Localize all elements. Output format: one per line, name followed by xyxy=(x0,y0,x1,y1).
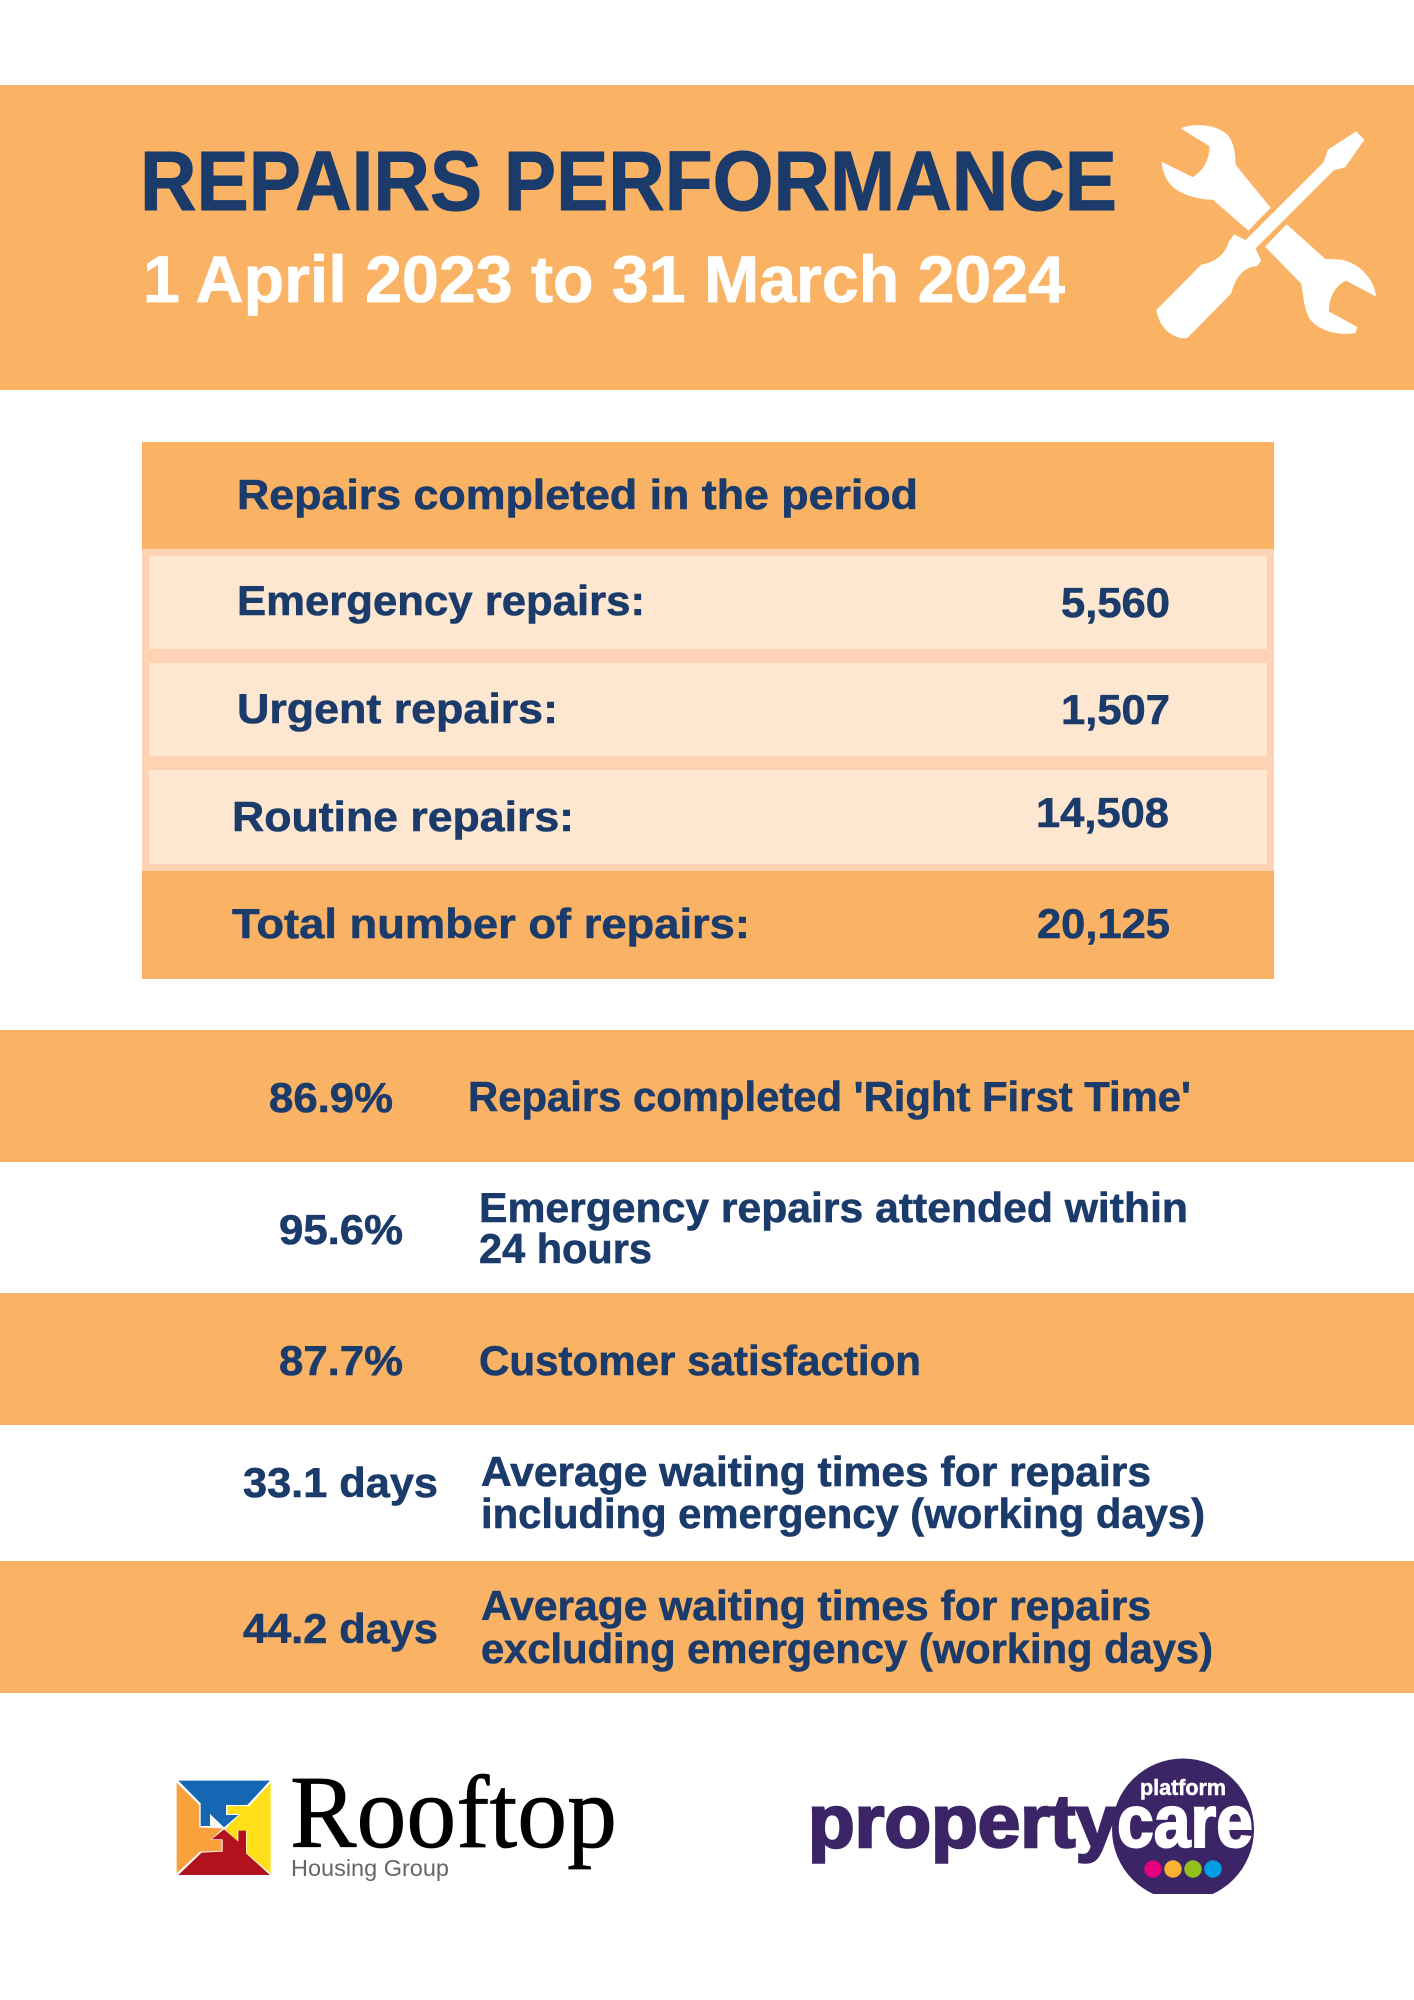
logo: Rooftop Housing Group: Rooftop xyxy=(290,1755,617,1870)
stat band: right first time: Repairs completed 'Right First Time' xyxy=(468,1073,1191,1120)
row: emergency repairs: Emergency repairs: xyxy=(237,577,645,624)
logo: Rooftop Housing Group: Housing Group xyxy=(291,1855,449,1881)
stat band: emergency attendance: 95.6% xyxy=(279,1206,403,1253)
stat band: waiting time including emergency xyxy=(243,1448,1205,1537)
header banner xyxy=(0,85,1414,390)
stat band: customer satisfaction: 87.7% xyxy=(279,1337,403,1384)
icon: crossed wrench and screwdriver xyxy=(1157,126,1375,338)
row: urgent repairs xyxy=(237,685,1170,733)
stat band: waiting time excluding emergency xyxy=(0,1561,1414,1693)
stat band: right first time xyxy=(0,1030,1414,1162)
row: total number of repairs xyxy=(232,900,1170,947)
row: routine repairs: Routine repairs: xyxy=(232,793,574,840)
row: total number of repairs: Total number of repairs: xyxy=(232,900,750,947)
stat band: emergency attendance: Emergency repairs attended within xyxy=(479,1184,1188,1231)
logo: Platform Property Care: care xyxy=(1117,1780,1253,1863)
logo: Platform Property Care xyxy=(808,1758,1254,1900)
stat band: waiting time including emergency: 33.1 days xyxy=(243,1459,438,1506)
stat band: emergency attendance: 24 hours xyxy=(479,1225,652,1272)
stat band: customer satisfaction xyxy=(0,1293,1414,1425)
panel: repairs completed table xyxy=(142,442,1274,979)
stat band: waiting time including emergency: including emergency (working days) xyxy=(481,1490,1205,1537)
subtitle: date range: 1 April 2023 to 31 March 2024 xyxy=(143,242,1065,316)
stat band: waiting time including emergency: Average waiting times for repairs xyxy=(481,1448,1151,1495)
stat band: waiting time excluding emergency: Average waiting times for repairs xyxy=(481,1582,1151,1629)
stat band: emergency attendance xyxy=(279,1184,1188,1272)
row: urgent repairs: 1,507 xyxy=(1061,686,1170,733)
row: emergency repairs xyxy=(237,577,1170,626)
row: routine repairs: 14,508 xyxy=(1036,789,1169,836)
stat band: customer satisfaction: Customer satisfaction xyxy=(479,1337,921,1384)
title: REPAIRS PERFORMANCE xyxy=(140,134,1117,228)
row: emergency repairs: 5,560 xyxy=(1061,579,1170,626)
table heading: Repairs completed in the period xyxy=(237,471,918,518)
row: routine repairs xyxy=(232,789,1169,840)
stat band: waiting time excluding emergency: 44.2 days xyxy=(243,1605,438,1652)
row: urgent repairs: Urgent repairs: xyxy=(237,685,558,732)
stat band: waiting time excluding emergency: excluding emergency (working days) xyxy=(481,1625,1213,1672)
row: total number of repairs: 20,125 xyxy=(1037,900,1170,947)
logo: Rooftop Housing Group xyxy=(177,1755,617,1881)
stat band: right first time: 86.9% xyxy=(269,1074,393,1121)
logo: Platform Property Care: platform xyxy=(1140,1775,1226,1800)
logo: Platform Property Care: property xyxy=(808,1780,1118,1863)
